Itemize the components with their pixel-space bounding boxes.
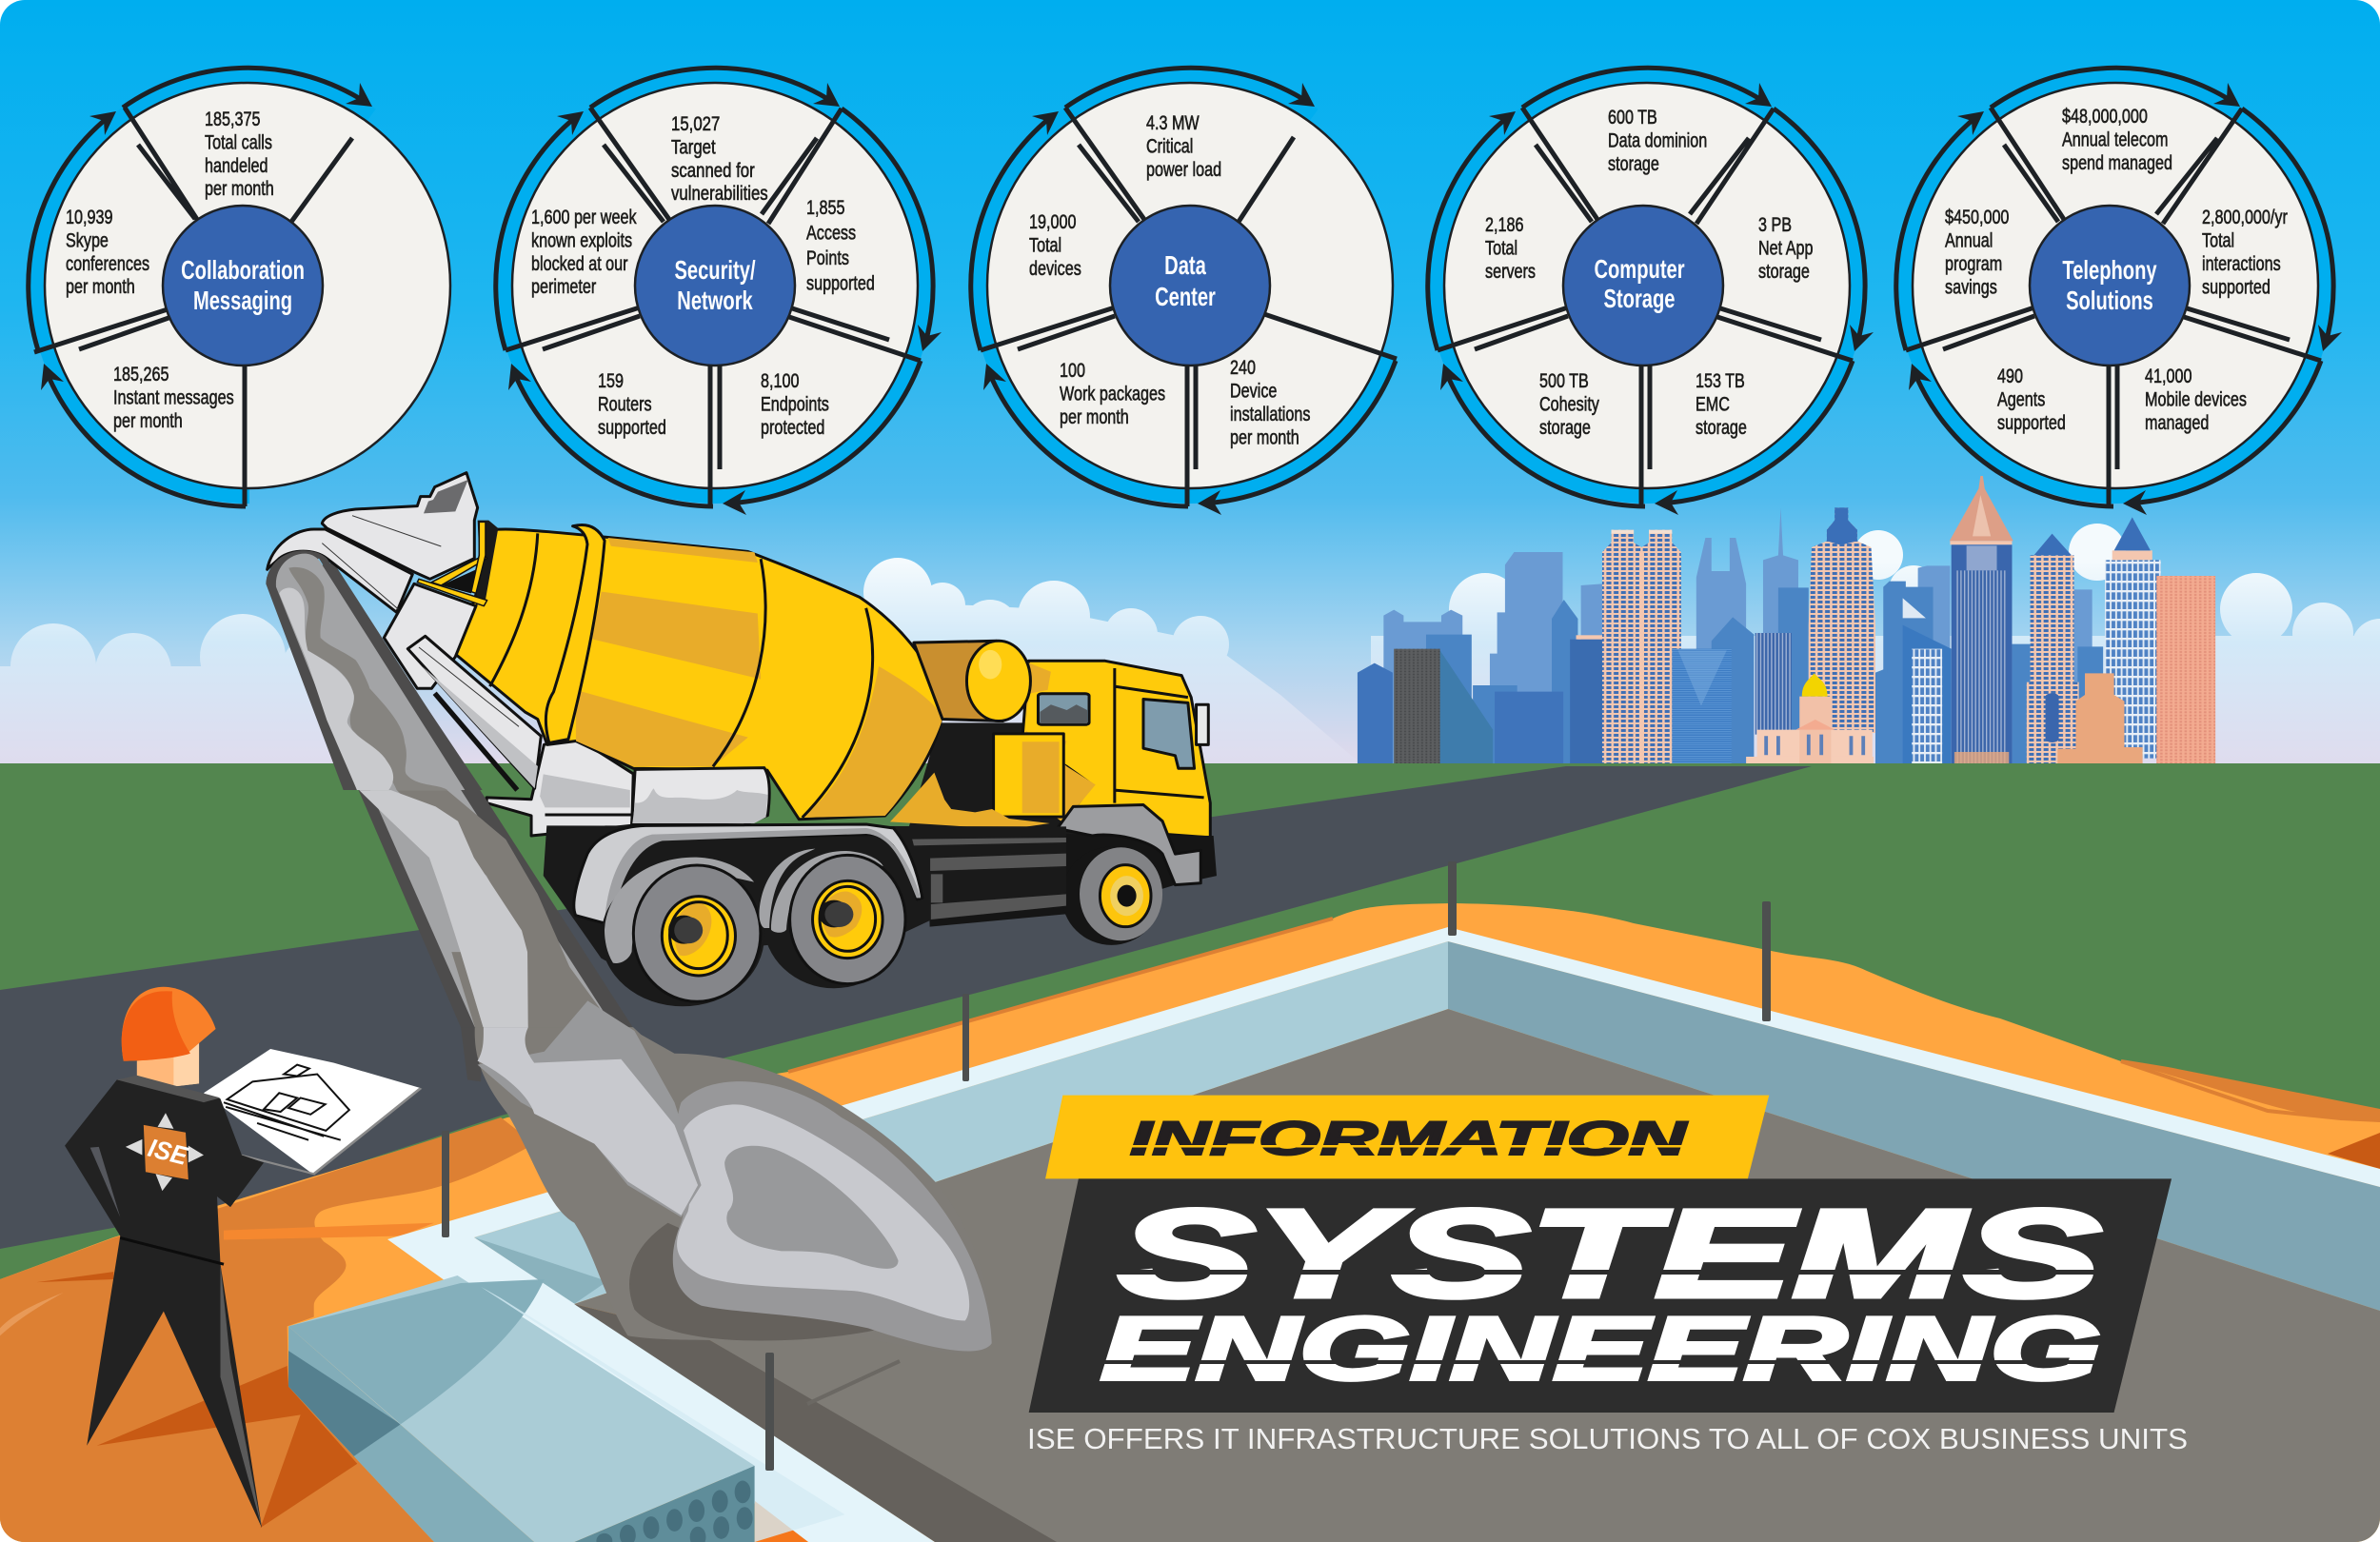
chassis rails [912,838,1066,919]
stat: mobile devices: managed [2145,411,2209,433]
water tank [914,641,1003,721]
stat: power: Critical [1146,134,1193,157]
neck [137,1042,199,1087]
badge arrows [126,1113,204,1191]
foundation rim [387,927,2380,1542]
stat: instant messages: Instant messages [113,386,234,408]
chute top [266,550,483,790]
peach tower [2027,534,2079,764]
mid buildings [1426,582,2103,764]
dark orange ground and shadows [0,1117,534,1542]
salmon tower [2156,576,2215,764]
stat: targets: Target [671,137,716,159]
side window [1143,699,1195,768]
front fender [1058,804,1200,885]
panel: telephony solutions wheel [1896,68,2342,515]
stat: servers: servers [1485,260,1536,282]
hub label: Center [1155,283,1216,312]
stat: data dominion: 600 TB [1608,106,1657,128]
drum highlights [576,538,942,818]
blue and white tower [1903,598,1952,764]
ring, disc, spokes and arrows [971,68,1397,515]
stat: interactions: supported [2202,275,2271,298]
blueprint [204,1049,421,1174]
panel: title [1027,1096,2188,1455]
front wheel [1061,846,1162,945]
lower hopper [384,583,476,688]
hub [1110,206,1270,366]
city skyline [1358,476,2215,764]
mud guard [574,824,922,923]
hub label: Telephony [2062,256,2157,286]
stat: net app: 3 PB [1758,213,1792,235]
security stats [531,113,875,438]
hollow block [288,1275,844,1542]
stat: servers: Total [1485,236,1517,259]
ring, disc, spokes and arrows [29,68,450,506]
dark plate [1029,1178,2172,1413]
stat: work packages: per month [1060,405,1129,427]
badge [144,1125,188,1179]
support arm [407,636,541,790]
stat: installations: installations [1230,403,1310,425]
panel: data center wheel [971,68,1397,515]
hub [163,206,323,366]
chassis [544,825,1066,978]
house sketch [224,1065,349,1140]
stat: calls: Total calls [205,130,272,153]
stat: targets: vulnerabilities [671,184,768,206]
twin peach tower [1602,530,1681,764]
stat: calls: per month [205,177,274,200]
heading: information: INFORMATION [1130,1112,1687,1165]
drum edge [476,521,498,606]
hub [1563,206,1723,366]
darker orange patch right [2121,1061,2380,1169]
stat: exploits: 1,600 per week [531,206,637,227]
concrete pile [461,1000,992,1354]
hub label: Solutions [2066,287,2153,316]
stat: interactions: Total [2202,228,2234,251]
low tan building [2057,673,2143,764]
stat: cohesity: Cohesity [1539,392,1599,415]
stat: interactions: 2,800,000/yr [2202,206,2288,227]
stat: savings: Annual [1945,228,1993,251]
stat: savings: program [1945,252,2002,274]
stat: net app: storage [1758,260,1810,282]
near wall band [574,1304,1057,1542]
hub [635,206,795,366]
stat: exploits: perimeter [531,275,596,298]
yellow bracket [417,522,487,606]
stat: telecom spend: spend managed [2062,151,2172,173]
stat: access points: 1,855 [806,196,844,218]
stat: routers: supported [598,416,666,438]
stat: exploits: known exploits [531,228,632,251]
stat: skype: per month [66,275,135,298]
stat: access points: supported [806,271,875,294]
foundation walls [474,941,2380,1311]
data center stats [1029,111,1310,448]
rear wheel 1 [601,858,764,1006]
yellow banner [1045,1096,1769,1178]
stat: endpoints: 8,100 [761,369,799,391]
drum [455,529,942,820]
ring, disc, spokes and arrows [1428,68,1874,515]
drum seams [490,533,873,818]
glass tower [1672,649,1732,764]
stat: telecom spend: Annual telecom [2062,128,2168,150]
stat: installations: 240 [1230,356,1256,378]
cab [1022,661,1210,838]
stat: access points: Points [806,247,849,268]
cab lines [1115,668,1204,803]
storage stats [1485,106,1814,438]
stat: devices: 19,000 [1029,210,1076,232]
stat: instant messages: per month [113,409,183,431]
hub label: Computer [1594,255,1685,285]
rear cab window [1038,694,1089,724]
hub label: Network [677,287,753,316]
stat: mobile devices: 41,000 [2145,365,2192,386]
hub label: Data [1164,251,1206,281]
stat: emc: storage [1696,416,1747,438]
stat: savings: savings [1945,275,1997,298]
white tower [2105,517,2161,759]
stat: targets: 15,027 [671,113,720,136]
stakes [442,861,1771,1471]
heading: engineering: ENGINEERING [1101,1298,2101,1398]
hub label: Storage [1603,285,1676,314]
stat: access points: Access [806,221,856,244]
under structure [907,722,1099,836]
stat: calls: 185,375 [205,108,260,129]
capitol building [1746,673,1874,764]
stat: net app: Net App [1758,236,1814,259]
ISE logo text: ISE [145,1133,191,1171]
stat: devices: Total [1029,233,1061,256]
grey blue tower [1755,633,1792,735]
stat: interactions: interactions [2202,252,2281,274]
road [0,766,1812,1249]
drum ring [545,524,605,742]
sky background [0,0,2380,764]
top hopper [322,473,478,579]
stat: cohesity: storage [1539,416,1591,438]
hopper shadow [424,480,468,513]
mirror [1197,704,1208,744]
panel: computer storage wheel [1428,68,1874,515]
rear frame detail [540,774,632,815]
yellow under drum [890,773,1050,830]
mud guard band [605,828,921,925]
stat: routers: Routers [598,392,652,415]
orange ground edge shading [788,919,2380,1120]
stray crack line [807,1361,900,1404]
stat: cohesity: 500 TB [1539,369,1589,391]
foundation floor [574,1009,2380,1542]
cab shade [1025,662,1096,823]
rear wheel 2 [759,849,905,988]
stat: endpoints: protected [761,416,824,438]
ring, disc, spokes and arrows [1896,68,2342,515]
stat: exploits: blocked at our [531,252,628,274]
drop box [632,768,769,825]
stat: power: 4.3 MW [1146,111,1200,133]
ring, disc, spokes and arrows [496,68,942,515]
stat: work packages: 100 [1060,359,1085,381]
stat: agents: Agents [1997,387,2045,410]
telephony stats [1945,105,2288,433]
helmet [122,987,216,1061]
stat: telecom spend: $48,000,000 [2062,105,2148,127]
stepped tower [1809,507,1875,733]
orange corner [755,1501,808,1542]
stat: agents: supported [1997,411,2066,433]
light strip [481,1287,844,1542]
stat: routers: 159 [598,369,624,391]
side face [288,1326,534,1542]
stat: mobile devices: Mobile devices [2145,387,2247,410]
chute body [267,563,633,1028]
stat: power: power load [1146,158,1221,180]
stat: emc: EMC [1696,392,1730,415]
panel: collaboration messaging wheel [29,68,450,506]
back buildings [1383,507,2092,764]
chute lip [268,529,412,612]
stat: installations: Device [1230,379,1277,402]
ground [0,763,2380,1542]
rear frame [486,738,633,836]
clouds [0,524,2380,735]
front chassis [926,832,1217,927]
stat: instant messages: 185,265 [113,363,169,385]
suit [65,1079,264,1528]
hub label: Collaboration [181,256,305,286]
worker figure [65,987,421,1528]
stat: work packages: Work packages [1060,382,1165,405]
stat: data dominion: Data dominion [1608,128,1707,151]
stat: skype: Skype [66,228,109,251]
stat: data dominion: storage [1608,152,1659,174]
heading: systems: SYSTEMS [1118,1183,2101,1323]
hub label: Security/ [674,256,756,286]
hub [2030,206,2190,366]
cement truck [266,473,1217,1028]
hub label: Messaging [193,287,292,316]
stat: targets: scanned for [671,160,755,182]
stat: endpoints: Endpoints [761,392,829,415]
stat: agents: 490 [1997,365,2023,386]
spire tower [1950,476,2013,764]
stat: skype: conferences [66,252,149,274]
stat: savings: $450,000 [1945,206,2009,227]
stat: skype: 10,939 [66,206,112,227]
stat: devices: devices [1029,257,1081,279]
dark tower [1440,650,1493,764]
top face [288,1275,755,1542]
tagline: ISE OFFERS IT INFRASTRUCTURE SOLUTIONS TO ALL OF COX BUSINESS UNITS [1027,1422,2188,1455]
stat: emc: 153 TB [1696,369,1745,391]
orange ground [0,903,2380,1542]
stat: installations: per month [1230,425,1299,448]
perforated face [574,1466,755,1542]
panel box [994,734,1063,817]
panel: security network wheel [496,68,942,515]
collaboration stats [66,108,274,431]
front blue buildings [1358,635,1613,764]
stat: calls: handeled [205,154,268,176]
stat: servers: 2,186 [1485,213,1523,235]
